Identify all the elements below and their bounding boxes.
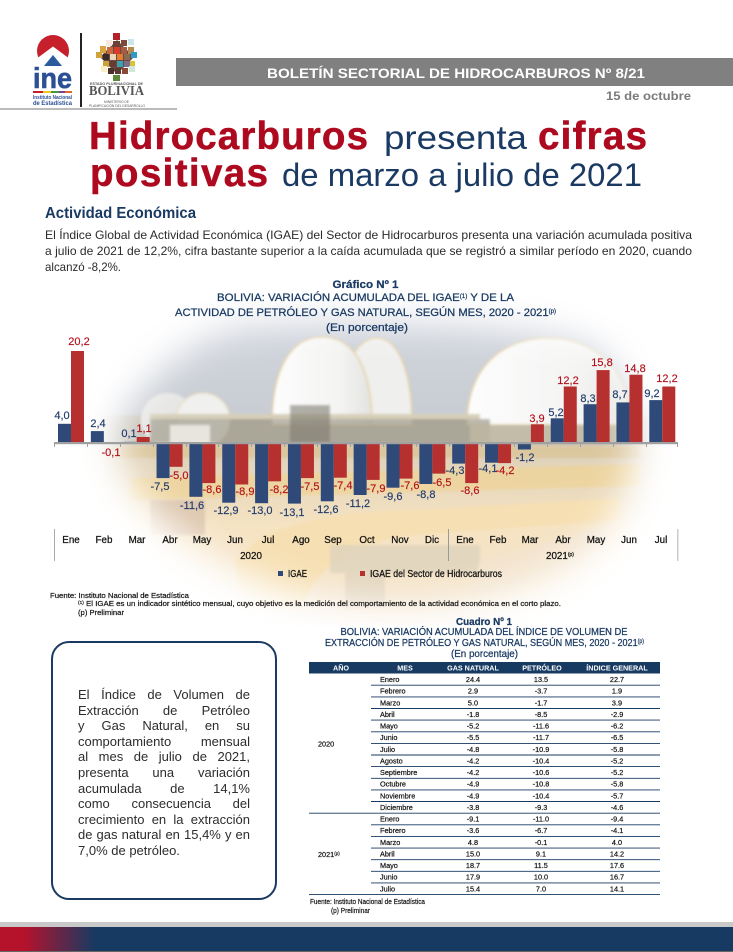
Hydrocarbon value labels: 15,8 — [591, 357, 613, 369]
table rows: Julio — [380, 745, 395, 754]
table rows: Julio — [380, 884, 395, 893]
table rows: Enero — [380, 675, 399, 684]
table rows: Junio — [380, 733, 397, 742]
table rows: Marzo — [380, 698, 400, 707]
month axis labels: Mar — [522, 535, 539, 546]
chart footnotes — [50, 591, 561, 617]
month axis labels: Ene — [62, 535, 80, 546]
IGAE value labels: 8,7 — [612, 389, 628, 401]
IGAE value labels: -13,1 — [279, 507, 305, 519]
table rows: Septiembre — [380, 768, 417, 777]
background photo: gas plant — [100, 306, 654, 622]
month axis labels: Dic — [425, 535, 439, 546]
table rows: Mayo — [380, 861, 398, 870]
table title: Cuadro Nº 1 — [456, 617, 512, 628]
month axis labels: Ene — [456, 535, 474, 546]
callout box: extraction index summary: presenta una variación — [78, 765, 250, 780]
intro paragraph: a julio de 2021 de 12,2%, cifra bastante superior a la caída acumulada que se registró a similar período en 2020, cuando — [45, 244, 692, 258]
Hydrocarbon value labels: 3,9 — [529, 413, 545, 425]
Hydrocarbon value labels: -8,2 — [270, 484, 288, 496]
table header: GAS NATURAL — [447, 664, 499, 672]
year labels: 2020 — [318, 740, 334, 748]
Hydrocarbon value labels: -8,9 — [236, 486, 254, 498]
table rows: -10.6 — [533, 768, 549, 777]
bar chart: IGAE vs IGAE Hidrocarburos — [54, 336, 678, 562]
IGAE value labels: 5,2 — [548, 407, 564, 419]
month axis labels: Jul — [655, 535, 667, 546]
main title: de marzo a julio de 2021 — [282, 157, 642, 193]
month axis labels: Jun — [227, 535, 243, 546]
table rows: 13.5 — [534, 675, 548, 684]
logo: Bolivia wordmark: ESTADO PLURINACIONAL DE — [90, 82, 143, 86]
IGAE value labels: 4,0 — [54, 410, 70, 422]
chart title: Y DE LA — [467, 292, 515, 304]
IGAE value labels: -12,6 — [313, 504, 339, 516]
month axis labels: Jun — [621, 535, 637, 546]
Hydrocarbon value labels: 12,2 — [557, 375, 579, 387]
table rows: Junio — [380, 873, 397, 882]
table rows: Enero — [380, 815, 399, 824]
logo: INE: de Estadística — [33, 101, 73, 107]
table rows: 22.7 — [610, 675, 624, 684]
table rows: -6.7 — [535, 826, 547, 835]
table rows: -6.2 — [611, 722, 623, 730]
Hydrocarbon value labels: -7,5 — [301, 481, 319, 493]
Hydrocarbon value labels: -8,6 — [203, 484, 221, 496]
table rows: 24.4 — [466, 675, 480, 684]
table title: (En porcentaje) — [451, 649, 518, 660]
table rows: -5.8 — [611, 780, 623, 789]
table rows: -4.9 — [467, 780, 479, 789]
IGAE value labels: 2,4 — [90, 418, 106, 430]
table rows: Diciembre — [380, 803, 413, 812]
logo: Estado Plurinacional de Bolivia emblem — [96, 33, 137, 81]
IGAE value labels — [54, 388, 660, 519]
table rows: -8.5 — [535, 710, 547, 719]
callout box: extraction index summary: 7,0% de petróleo. — [78, 843, 180, 858]
table rows: -4.9 — [467, 791, 479, 800]
table rows: -11.6 — [533, 722, 549, 730]
chart title: Gráfico Nº 1 — [332, 279, 398, 291]
table header: PETRÓLEO — [522, 664, 562, 672]
IGAE value labels: 0,1 — [121, 428, 137, 440]
table rows: 17.6 — [610, 861, 624, 870]
Hydrocarbon value labels: 12,2 — [656, 373, 678, 385]
intro paragraph — [45, 227, 692, 274]
month axis labels: May — [193, 535, 211, 546]
table rows: -11.0 — [533, 815, 549, 824]
table rows: -2.9 — [611, 710, 623, 719]
chart footnotes: (p) Preliminar — [78, 608, 125, 617]
IGAE value labels: -12,9 — [213, 505, 239, 517]
table rows: -5.5 — [467, 733, 479, 742]
table rows: -4.1 — [611, 826, 623, 835]
data table — [309, 662, 660, 895]
table rows: -4.2 — [467, 768, 479, 777]
callout box: extraction index summary: Extracción de Petróleo — [78, 703, 250, 718]
Hydrocarbon IGAE bars — [71, 351, 675, 484]
table rows: -5.2 — [611, 768, 623, 777]
table rows: -10.8 — [533, 780, 549, 789]
callout box: extraction index summary: crecimiento en la extracción — [78, 812, 250, 827]
table rules — [309, 685, 660, 895]
callout box: extraction index summary: de gas natural en 15,4% y en — [78, 827, 250, 842]
chart legend: IGAE — [288, 569, 307, 580]
table rows: -9.3 — [535, 803, 547, 812]
table rows: -11.7 — [533, 733, 549, 742]
table footnotes: Fuente: Instituto Nacional de Estadística — [310, 897, 426, 906]
table rows: -4.6 — [611, 803, 623, 812]
table rows: -9.4 — [611, 815, 623, 824]
month axis labels: 2020 — [240, 551, 262, 562]
table rows: 15.4 — [466, 884, 480, 893]
table rows: -0.1 — [535, 838, 547, 847]
chart legend — [278, 569, 502, 580]
table rows: Agosto — [380, 756, 403, 765]
table rows: -10.9 — [533, 745, 549, 754]
logo: Bolivia wordmark: BOLIVIA — [89, 84, 145, 99]
Hydrocarbon value labels: -7,9 — [367, 483, 385, 495]
table rows: 4.0 — [612, 838, 622, 847]
IGAE value labels: -11,6 — [180, 500, 204, 512]
table rows: 17.9 — [466, 873, 480, 882]
IGAE value labels: -11,2 — [346, 498, 370, 510]
table header: ÍNDICE GENERAL — [586, 664, 648, 672]
IGAE value labels: 9,2 — [644, 388, 660, 400]
table header: MES — [397, 664, 413, 672]
logo: Bolivia wordmark: PLANIFICACIÓN DEL DESARROLLO — [89, 103, 145, 108]
month axis labels: Mar — [129, 535, 146, 546]
IGAE value labels: 8,3 — [580, 393, 596, 405]
month axis labels: Abr — [162, 535, 178, 546]
table rows: 10.0 — [534, 873, 548, 882]
chart title: ACTIVIDAD DE PETRÓLEO Y GAS NATURAL, SEGÚN MES, 2020 - 2021 — [175, 307, 548, 319]
Hydrocarbon value labels: -7,6 — [401, 480, 419, 492]
table title: BOLIVIA: VARIACIÓN ACUMULADA DEL ÍNDICE DE VOLUMEN DE — [340, 625, 628, 638]
logo: Bolivia wordmark — [89, 82, 145, 108]
IGAE value labels: -4,1 — [479, 463, 497, 475]
table rows: 14.1 — [610, 884, 624, 893]
table rows: 3.9 — [612, 698, 622, 707]
main title: Hidrocarburos — [89, 115, 368, 158]
table header: AÑO — [333, 664, 349, 672]
callout box: extraction index summary: acumulada de 14,1% — [78, 781, 250, 796]
IGAE value labels: -4,3 — [446, 465, 464, 477]
table rows: Abril — [380, 710, 395, 719]
table rows: -5.2 — [467, 722, 479, 730]
table rows: -1.7 — [535, 698, 547, 707]
intro paragraph: El Índice Global de Actividad Económica (IGAE) del Sector de Hidrocarburos presenta una variación acumulada positiva — [45, 227, 692, 242]
table rows: -5.2 — [611, 756, 623, 765]
month axis labels: 2021 — [546, 551, 568, 562]
logo: INE: ine — [33, 63, 72, 95]
table rows: Abril — [380, 850, 395, 858]
year labels — [318, 740, 340, 859]
table rows: 9.1 — [536, 850, 546, 858]
table rows: -5.7 — [611, 791, 623, 800]
chart title: (p) — [549, 309, 556, 315]
table header — [309, 662, 660, 674]
main title: cifras — [538, 115, 647, 158]
chart title: (1) — [460, 294, 467, 300]
table rows: -6.5 — [611, 733, 623, 742]
callout box: extraction index summary: como consecuencia del — [78, 796, 250, 811]
chart title — [175, 279, 556, 334]
IGAE value labels: -1,2 — [516, 452, 534, 464]
table title — [325, 617, 644, 660]
logo: Bolivia wordmark: MINISTERIO DE — [104, 100, 130, 104]
Hydrocarbon value labels: -4,2 — [496, 465, 514, 477]
month axis labels: Jul — [262, 535, 274, 546]
table title: (p) — [638, 639, 644, 645]
Hydrocarbon value labels: 1,1 — [136, 423, 152, 435]
table rows: 18.7 — [466, 861, 480, 870]
Hydrocarbon value labels: 20,2 — [68, 336, 90, 348]
table rows: Febrero — [380, 826, 406, 835]
callout box: extraction index summary: al mes de julio de 2021, — [78, 749, 250, 764]
axis — [54, 442, 678, 447]
callout box: extraction index summary: y Gas Natural, en su — [78, 718, 250, 733]
main title: positivas — [90, 152, 268, 195]
table rows: -3.7 — [535, 687, 547, 696]
Hydrocarbon value labels: -7,4 — [334, 480, 352, 492]
table rows: 11.5 — [534, 861, 548, 870]
table rows: -4.8 — [467, 745, 479, 754]
Hydrocarbon value labels: -5,0 — [170, 470, 188, 482]
table rows: Febrero — [380, 687, 406, 696]
intro paragraph: alcanzó -8,2%. — [45, 260, 121, 274]
month axis labels: Oct — [359, 535, 375, 546]
month axis labels: Nov — [391, 535, 409, 546]
year labels: 2021 — [318, 850, 334, 859]
chart legend: IGAE del Sector de Hidrocarburos — [370, 569, 502, 580]
table rows: Octubre — [380, 780, 406, 789]
table rows: Marzo — [380, 838, 400, 847]
callout box: extraction index summary: comportamiento mensual — [78, 734, 250, 749]
header bar: bulletin title — [176, 58, 733, 86]
month axis labels: Abr — [555, 535, 571, 546]
month axis labels: May — [587, 535, 605, 546]
chart footnotes: (1) — [78, 600, 84, 605]
table rows: -4.2 — [467, 756, 479, 765]
logo divider and header rule — [0, 33, 177, 110]
IGAE value labels: -9,6 — [384, 491, 402, 503]
table rows: -3.6 — [467, 826, 479, 835]
IGAE value labels: -8,8 — [417, 489, 435, 501]
chart title: (En porcentaje) — [326, 322, 408, 334]
table footnotes: (p) Preliminar — [331, 906, 370, 915]
Hydrocarbon value labels: -8,6 — [461, 485, 479, 497]
IGAE bars — [58, 400, 662, 504]
header bar: bulletin title: BOLETÍN SECTORIAL DE HIDROCARBUROS Nº 8/21 — [267, 65, 645, 81]
logo: INE: Instituto Nacional — [33, 95, 72, 101]
table rows: 15.0 — [466, 850, 480, 858]
table rows: 16.7 — [610, 873, 624, 882]
month axis labels: Sep — [324, 535, 342, 546]
table rows: 1.9 — [612, 687, 622, 696]
month axis labels: (p) — [568, 552, 574, 558]
Hydrocarbon value labels: 14,8 — [624, 363, 646, 375]
table footnotes — [310, 897, 426, 915]
month axis labels: Feb — [490, 535, 507, 546]
table rows: 4.8 — [468, 838, 478, 847]
table rows: Mayo — [380, 722, 398, 730]
footer band — [0, 922, 733, 952]
year labels: (p) — [334, 851, 340, 856]
Hydrocarbon value labels — [68, 336, 678, 498]
month axis labels: Ago — [292, 535, 310, 546]
table rows: -5.8 — [611, 745, 623, 754]
table rows: 7.0 — [536, 884, 546, 893]
Hydrocarbon value labels: -6,5 — [433, 477, 451, 489]
IGAE value labels: -7,5 — [151, 481, 169, 493]
section heading: Actividad Económica — [45, 205, 196, 222]
chart footnotes: Fuente: Instituto Nacional de Estadística — [50, 591, 190, 600]
main title: presenta — [384, 120, 527, 157]
callout box: extraction index summary — [51, 641, 277, 900]
month axis labels: Feb — [96, 535, 113, 546]
IGAE value labels: -13,0 — [247, 505, 273, 517]
logo: INE — [28, 35, 78, 107]
Hydrocarbon value labels: -0,1 — [102, 447, 120, 459]
table rows: Noviembre — [380, 791, 415, 800]
table rows: 14.2 — [610, 850, 624, 858]
table rows: -9.1 — [467, 815, 479, 824]
table rows: -1.8 — [467, 710, 479, 719]
chart title: BOLIVIA: VARIACIÓN ACUMULADA DEL IGAE — [217, 292, 454, 304]
table rows: -10.4 — [533, 791, 549, 800]
table title: EXTRACCIÓN DE PETRÓLEO Y GAS NATURAL, SEGÚN MES, 2020 - 2021 — [325, 638, 684, 649]
month axis labels — [54, 529, 678, 562]
table rows: -3.8 — [467, 803, 479, 812]
table rows: -10.4 — [533, 756, 549, 765]
main title — [89, 115, 647, 195]
table rows: 2.9 — [468, 687, 478, 696]
chart footnotes: El IGAE es un indicador sintético mensual, cuyo objetivo es la medición del comportamiento de la actividad económica en el corto plazo. — [84, 599, 561, 608]
table rows: 5.0 — [468, 698, 478, 707]
table rows — [380, 675, 624, 893]
publication date: 15 de octubre — [606, 91, 691, 103]
callout box: extraction index summary: El Índice de Volumen de — [78, 687, 250, 702]
